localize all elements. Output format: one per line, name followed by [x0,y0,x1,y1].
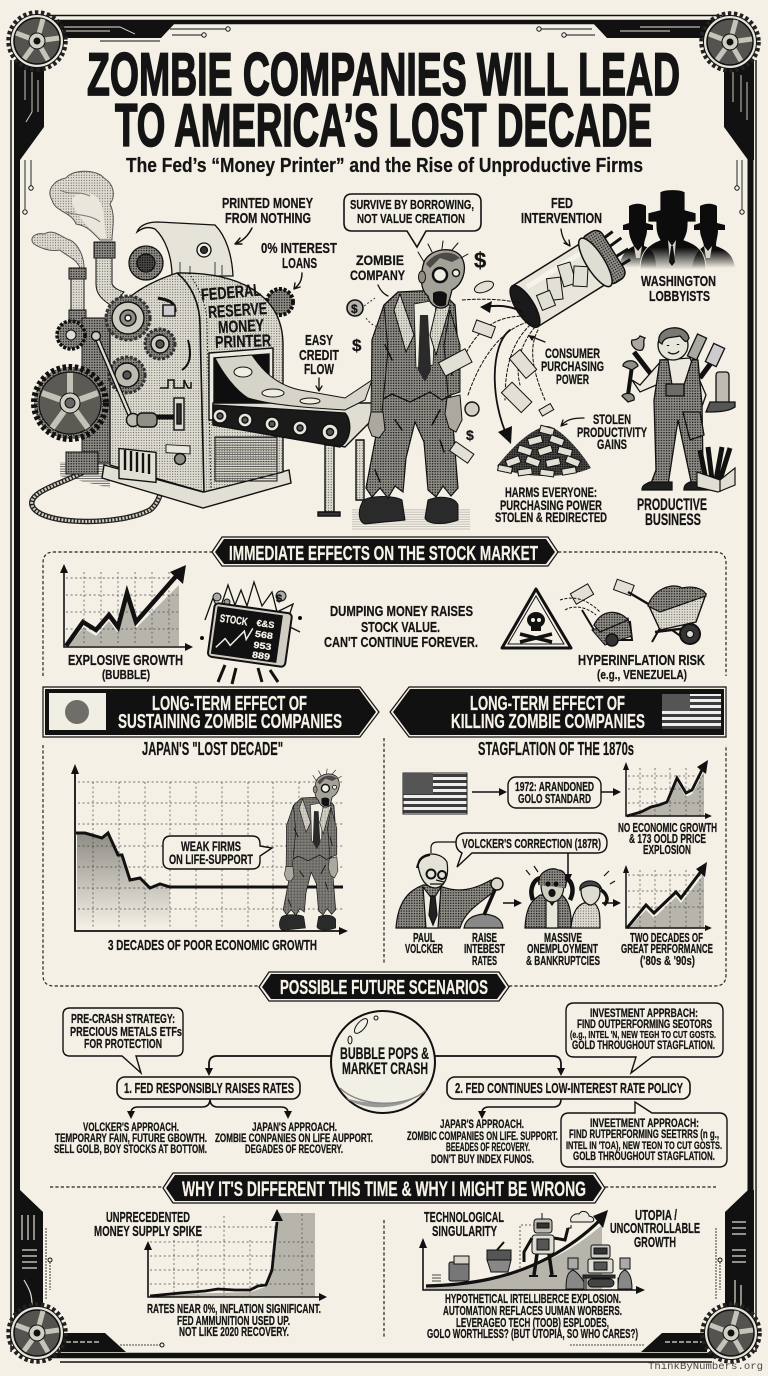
illustration: side gear [267,289,293,315]
text: japan's approach 1: DEGADES OF RECOVERY. [245,1144,343,1156]
callout: pre-crash strategy: FOR PROTECTION [84,1036,162,1051]
label: zombie company: ZOMBIE [356,252,404,268]
text: dumping money: CAN'T CONTINUE FOREVER. [324,634,478,651]
label: technological singularity [424,1209,504,1240]
illustration: smoke [32,171,113,268]
label: paul volcker: PAUL [413,931,435,945]
label: zero percent loans [261,240,337,289]
label: no economic growth: NO ECONOMIC GROWTH [618,821,717,835]
arrow [602,899,621,907]
panel: scenarios [54,1003,727,1167]
callout: pre-crash strategy: PRE-CRASH STRATEGY: [71,1011,175,1026]
callout: weak firms on life support: ON LIFE-SUPPORT [169,851,253,867]
chart: two decades of performance [623,862,712,931]
box: fed raises rates [117,1077,300,1099]
panel dividers for long-term section [43,738,726,986]
icon: flying bills and coins: $ [466,427,474,443]
illustration: machine back, wheel and lever [34,318,114,474]
label: consumer purchasing power: POWER [556,371,589,387]
chart: explosive growth [60,564,193,651]
label: easy credit flow: EASY [305,332,333,349]
label: productive business: BUSINESS [645,510,701,529]
illustration: tool box [697,447,735,492]
illustration: hero zombie [359,241,468,524]
arrows: branches [127,1099,561,1119]
text: volcker's approach [54,1122,207,1156]
corner gear: top left [8,12,66,70]
panel: hero illustration [32,171,735,530]
text: rates near zero [147,1302,321,1339]
arrow [503,899,522,907]
icon: bubble: BUBBLE POPS & [340,1044,429,1063]
heading banner: sustaining zombie companies: SUSTAINING ZOMBIE COMPANIES [118,711,342,733]
label: utopia uncontrollable growth: UTOPIA / [635,1207,678,1224]
label: zero percent loans: 0% INTEREST [261,240,337,257]
text: hypothetical intelligence explosion: AUTOMATION REFLACES UUMAN WORBERS. [443,1304,622,1318]
text: machine name: FEDERAL [200,281,262,305]
text: japan's approach 1 [215,1122,373,1156]
icon: exploding stock board: $ [276,593,282,605]
icon: standing robot [524,1213,571,1276]
callout: pre-crash strategy [63,1008,183,1073]
icon: exploding stock board [200,582,302,684]
label: stolen productivity gains: STOLEN [593,411,631,427]
icon: bubble [331,1011,435,1113]
text: japan's approach 1: JAPAN'S APPROACH. [252,1122,337,1134]
heading banner: possible future scenarios [259,972,509,1001]
label: harms everyone: PURCHASING POWER [500,497,602,513]
label: stolen productivity gains: GAINS [597,436,627,452]
label: hyperinflation risk: HYPERINFLATION RISK [578,652,705,669]
chart: gold price explosion [623,760,712,819]
box: fed raises rates: 1. FED RESPONSIBLY RAISES RATES [124,1080,294,1097]
label: money supply spike: UNPRECEDENTED [106,1209,190,1226]
arrow: correction to unemployment [564,853,572,883]
label: consumer purchasing power [541,345,604,387]
label: utopia uncontrollable growth [610,1207,700,1251]
text: dumping money: STOCK VALUE. [361,619,440,636]
text: hypothetical intelligence explosion [427,1292,638,1341]
top-left circuit traces [23,27,230,214]
text: japan's approach 1: ZOMBIE CONPANIES ON LIFE AUPPORT. [215,1133,373,1145]
icon: early machines [432,1242,511,1281]
label: two decades: GREAT PERFORMANCE [621,942,713,956]
callout: volcker's correction [431,833,607,867]
label: money supply spike: MONEY SUPPLY SPIKE [94,1223,202,1240]
icon: factory robots [566,1245,632,1290]
label: two decades [621,931,713,968]
heading banner: sustaining zombie companies [43,687,379,737]
text: volcker's approach: TEMPORARY FAIN, FUTURE GBOWTH. [55,1133,207,1145]
label: productive business: PRODUCTIVE [637,495,707,514]
icon: hazard triangle with skull [502,589,571,648]
label: massive unemployment: & BANKRUPTCIES [526,954,600,968]
illustration: paper roll and printed bill [129,222,233,280]
label: easy credit flow: FLOW [304,361,335,378]
icon: exploding stock board: 953 [253,640,272,652]
text: japan's approach 2: DON'T BUY INDEX FUNOS. [431,1154,534,1166]
text: machine name [200,281,271,352]
heading banner: killing zombie companies [390,687,726,737]
callout: survive by borrowing: SURVIVE BY BORROWING, [350,197,474,212]
icon: usa flag large [403,773,467,814]
text: rates near zero: RATES NEAR 0%, INFLATION SIGNIFICANT. [147,1302,321,1316]
corner gear: bottom left [8,1304,66,1362]
callout: volcker's correction: VOLCKER'S CORRECTION (187R) [462,836,601,851]
callout: weak firms on life support [163,836,272,869]
label: easy credit flow [299,332,339,391]
icon: exploding stock board: 889 [251,650,271,662]
heading banner: possible future scenarios: POSSIBLE FUTURE SCENARIOS [280,977,488,999]
callout: investment approach bottom: INVEETMENT APPROACH: [590,1118,699,1130]
icon: exploding stock board: 568 [254,629,274,641]
label: two decades: ('80s & '90s) [640,954,695,968]
panel: stagflation of the 1970s [396,739,717,968]
label: fed intervention: INTERVENTION [521,210,602,227]
icon: cloud [571,1211,594,1222]
heading banner: immediate effects: IMMEDIATE EFFECTS ON THE STOCK MARKET [229,543,538,565]
label: harms everyone: STOLEN & REDIRECTED [495,509,607,525]
text: machine name: MONEY [218,316,265,337]
arrow [601,788,621,796]
chart: japan economic growth [71,764,348,935]
label: zero percent loans: LOANS [282,255,317,272]
text: hypothetical intelligence explosion: LEVERAGEO TECH (TOOB) ESPLODES, [456,1316,609,1330]
label: utopia uncontrollable growth: GROWTH [634,1234,676,1251]
label: consumer purchasing power: PURCHASING [541,358,604,374]
callout: investment approach top: FIND OUTPERFORMING SEOTORS [577,1019,712,1031]
callout: survive by borrowing: NOT VALUE CREATION [357,211,465,226]
heading banner: immediate effects [212,537,558,566]
label: explosive growth [68,652,183,682]
box: abandoned gold standard: 1972: ARANDONED [515,780,594,794]
icon: bubble: MARKET CRASH [342,1059,428,1078]
heading: japan lost decade: JAPAN'S "LOST DECADE" [142,739,283,759]
illustration: zombie on chart [279,769,341,930]
label: fed intervention [521,195,602,246]
title [87,41,680,159]
label: washington lobbyists: LOBBYISTS [649,288,710,305]
illustration: productive business worker [622,328,735,490]
callout: investment approach top [566,1003,723,1073]
icon: dollar signs and coins near zombie: $ [352,336,362,355]
label: two decades: TWO DECADES OF [630,931,703,945]
label: fed intervention: FED [551,195,573,212]
illustration: paul volcker at lever [396,854,503,928]
illustration: money stream arrows [462,299,545,444]
label: harms everyone: HARMS EVERYONE: [505,484,597,500]
label: technological singularity: SINGULARITY [432,1223,497,1240]
text: volcker's approach: SELL GOLB, BOY STOCKS AT BOTTOM. [54,1144,207,1156]
box: abandoned gold standard [508,777,601,808]
chart: money supply spike [144,1209,327,1301]
icon: japan flag [49,693,106,730]
illustration: washington lobbyist silhouettes [619,190,735,270]
illustration: ground hatching under zombie [352,508,470,530]
chart: technological singularity [419,1210,645,1294]
heading banner: sustaining zombie companies: LONG-TERM EFFECT OF [152,693,307,715]
label: printed money [222,195,313,244]
heading banner: why it's different [50,1173,716,1203]
text: japan's approach 2: BEEADES OF RECOVERY. [446,1142,530,1154]
label: paul volcker [405,931,443,956]
label: utopia uncontrollable growth: UNCONTROLLABLE [610,1220,700,1237]
label: no economic growth [618,821,717,857]
label: money supply spike [94,1209,202,1240]
icon: usa flag [662,694,721,729]
icon: dollar signs and coins near zombie: $ [351,302,358,316]
label: consumer purchasing power: CONSUMER [545,345,600,361]
text: hypothetical intelligence explosion: GOLO WORTHLESS? (BUT UTOPIA, SO WHO CARES?) [427,1327,638,1341]
bottom-right corner plate [570,1190,754,1352]
box: fed continues low rates [447,1077,690,1099]
icon: exploding stock board: STOCK [219,613,248,628]
label: productive business [637,495,707,529]
illustration: output slot [209,348,273,420]
illustration: money on belt [215,355,372,410]
label: printed money: FROM NOTHING [225,210,311,227]
callout: investment approach bottom [561,1102,727,1167]
label: no economic growth: & 173 OOLD PRICE [629,832,706,846]
label: paul volcker: VOLCKER [405,942,443,956]
icon: flying bills and coins [438,279,554,463]
label: explosive growth: (BUBBLE) [102,667,150,682]
label: washington lobbyists: WASHINGTON [641,273,716,290]
text: japan's approach 2: ZOMBIC COMPANIES ON LIFE. SUPPORT. [407,1131,558,1143]
watermark: ThinkByNumbers.org [648,1361,763,1373]
corner gear: top right [702,14,758,70]
illustration: printer body [92,273,291,508]
text: volcker's approach: VOLCKER'S APPROACH. [83,1122,179,1134]
callout: survive by borrowing [344,194,481,247]
label: massive unemployment: ONEMPLOYMENT [527,942,598,956]
corner gear: bottom right [702,1304,760,1362]
label: zombie company: COMPANY [350,267,406,283]
top-right corner plate [590,20,754,160]
label: raise interest rates [464,931,505,968]
illustration: chimneys [69,242,124,323]
label: raise interest rates: INTEBEST [464,942,505,956]
subtitle: The Fed’s “Money Printer” and the Rise of Unproductive Firms [126,155,643,177]
callout: pre-crash strategy: PRECIOUS METALS ETFs [70,1024,182,1039]
text: machine name: PRINTER [215,331,271,352]
illustration: pipe of stolen money [503,220,640,335]
heading: stagflation: STAGFLATION OF THE 1870s [478,739,634,759]
label: no economic growth: EXPLOSION [643,843,691,857]
panel: why it might differ [94,1207,700,1341]
label: hyperinflation risk: (e.g., VENEZUELA) [597,667,687,682]
icon: exploding stock board: €&S [256,618,275,630]
box: abandoned gold standard: GOLO STANDARD [518,792,591,806]
text: dumping money [324,603,478,651]
callout: weak firms on life support: WEAK FIRMS [181,838,241,854]
callout: investment approach top: INVESTMENT APPRBACH: [590,1008,698,1020]
label: stolen productivity gains [561,411,647,452]
panel: immediate effects on the stock market [43,537,726,684]
icon: dollar signs and coins near zombie [347,248,486,355]
label: easy credit flow: CREDIT [299,347,339,364]
text: rates near zero: NOT LIKE 2020 RECOVERY. [179,1325,289,1339]
text: hypothetical intelligence explosion: HYPOTHETICAL IRTELLIBERCE EXPLOSION. [445,1292,621,1306]
illustration: conveyor belt [213,403,376,516]
label: technological singularity: TECHNOLOGICAL [424,1209,504,1226]
label: stolen productivity gains: PRODUCTIVITY [577,424,647,440]
label: raise interest rates: RAISE [472,931,497,945]
label: massive unemployment [526,931,600,968]
label: massive unemployment: MASSIVE [544,931,582,945]
label: harms everyone [495,484,607,525]
icon: wheelbarrows of money [560,579,706,646]
icon: dollar signs and coins near zombie: $ [474,248,486,273]
arrow [472,788,507,796]
label: hyperinflation risk [578,652,705,682]
top-left corner plate [15,20,178,160]
arrows from bubble [205,1056,565,1076]
text: japan's approach 2: JAPAR'S APPROACH. [440,1119,524,1131]
label: printed money: PRINTED MONEY [222,195,313,212]
top-right circuit traces [537,27,744,214]
text: machine name: RESERVE [207,299,268,322]
text: rates near zero: FED AMMUNITION USED UP. [177,1314,290,1328]
illustration: worried workers [525,866,615,928]
label: raise interest rates: RATES [472,954,497,968]
label: explosive growth: EXPLOSIVE GROWTH [68,652,183,669]
label: washington lobbyists [641,273,716,305]
panel: japan lost decade [71,739,348,954]
illustration: hose and ground shading [32,458,180,521]
heading banner: killing zombie companies: LONG-TERM EFFECT OF [470,693,625,715]
label: zombie company [350,252,406,296]
label: poor growth: 3 DECADES OF POOR ECONOMIC GROWTH [108,937,317,954]
text: japan's approach 2 [407,1119,558,1166]
illustration: stolen money pile [497,425,591,477]
heading banner: killing zombie companies: KILLING ZOMBIE COMPANIES [451,711,645,733]
text: dumping money: DUMPING MONEY RAISES [330,603,473,620]
bottom-left corner plate [15,1190,164,1352]
